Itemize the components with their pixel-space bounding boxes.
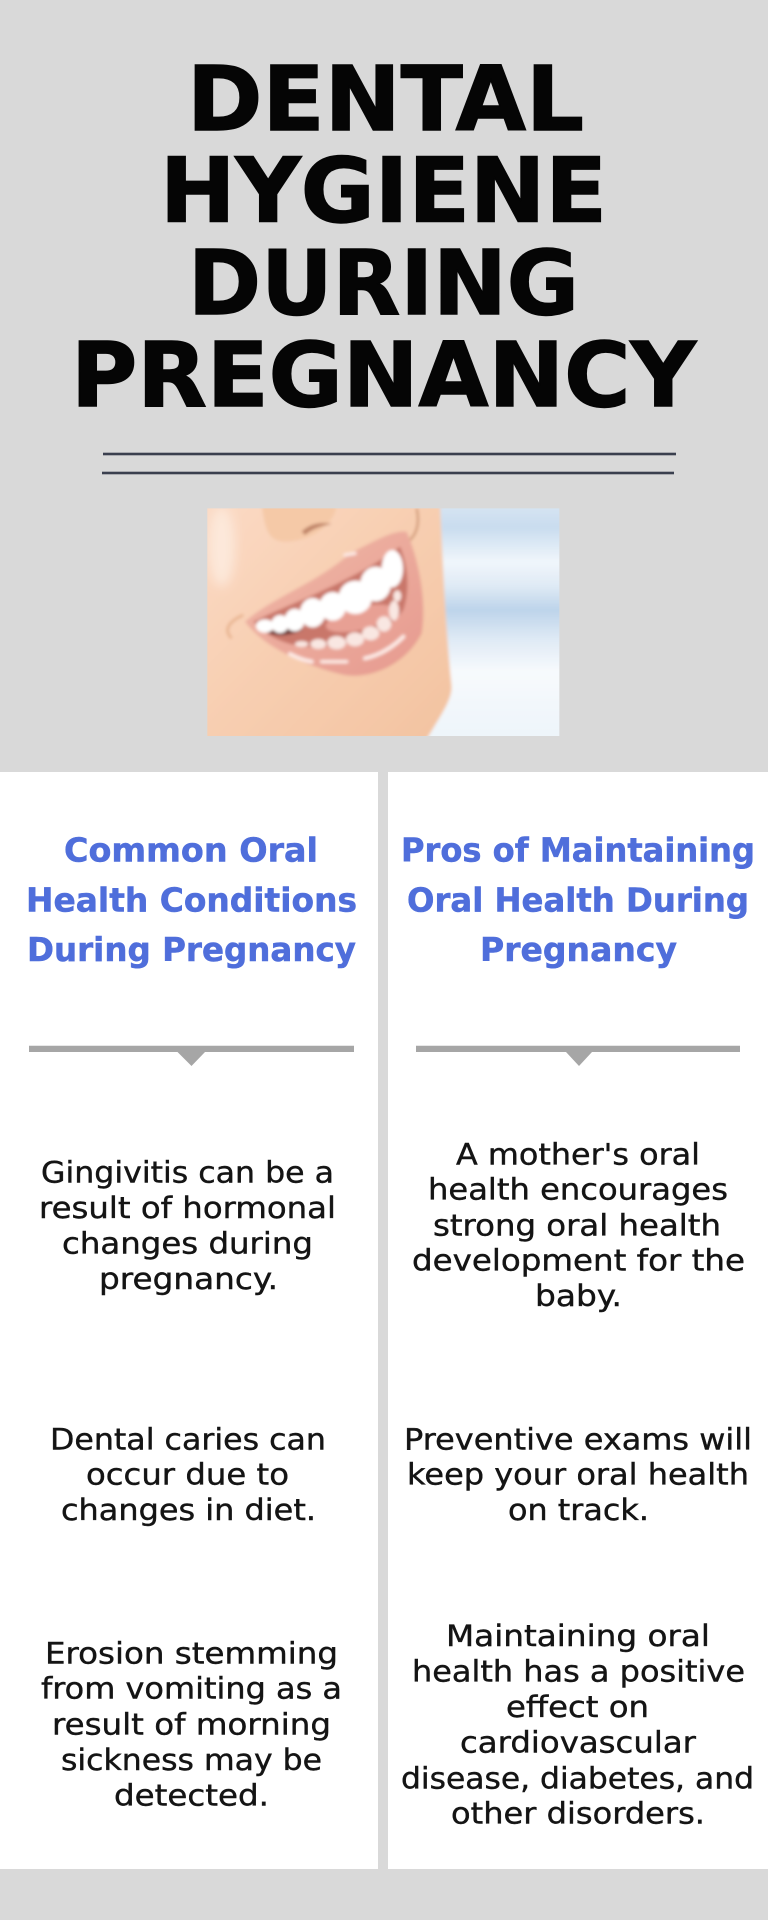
text block: preventive exams <box>404 1422 752 1527</box>
text block: gingivitis: Gingivitis can be a <box>41 1155 334 1189</box>
text block: gingivitis <box>39 1155 336 1296</box>
text block: dental caries: occur due to <box>86 1458 289 1492</box>
text block: dental caries: changes in diet. <box>61 1493 316 1527</box>
text block: preventive exams: keep your oral health <box>407 1458 749 1492</box>
text block: mother's oral health: health encourages <box>428 1173 728 1207</box>
lower teeth <box>295 590 401 649</box>
text block: mother's oral health: development for the <box>412 1243 745 1277</box>
text block: preventive exams: on track. <box>508 1493 649 1527</box>
text block: dental caries: Dental caries can <box>50 1422 326 1456</box>
heading: common oral health conditions: During Pregnancy <box>27 930 356 969</box>
heading: pros of maintaining oral health: Pregnancy <box>480 930 677 969</box>
photo background: blurred sky <box>426 508 560 736</box>
dark gap <box>265 628 303 635</box>
heading: common oral health conditions <box>26 831 357 969</box>
panel: right column <box>388 772 768 1869</box>
text block: mother's oral health <box>412 1137 745 1313</box>
text block: maintaining oral health: other disorders. <box>451 1796 705 1830</box>
title: DURING <box>188 231 579 335</box>
mouth interior <box>253 547 407 647</box>
title: DENTAL <box>187 47 584 151</box>
text block: maintaining oral health <box>401 1619 754 1830</box>
tongue <box>324 603 390 634</box>
title: PREGNANCY <box>71 323 698 427</box>
title <box>71 47 698 427</box>
heading: common oral health conditions: Health Conditions <box>26 881 357 920</box>
text block: dental caries <box>50 1422 326 1527</box>
text block: gingivitis: pregnancy. <box>99 1262 278 1296</box>
heading: pros of maintaining oral health <box>401 831 755 969</box>
title double rule <box>102 453 676 474</box>
text block: maintaining oral health: Maintaining oral <box>446 1619 710 1653</box>
text block: erosion: result of morning <box>52 1707 331 1741</box>
upper teeth <box>256 550 403 633</box>
text block: maintaining oral health: disease, diabetes, and <box>401 1761 754 1795</box>
heading: pros of maintaining oral health: Oral Health During <box>407 881 749 920</box>
lip highlights <box>290 553 403 662</box>
text block: erosion: from vomiting as a <box>41 1672 342 1706</box>
text block: maintaining oral health: health has a positive <box>412 1655 745 1689</box>
text block: mother's oral health: A mother's oral <box>456 1137 700 1171</box>
text block: mother's oral health: baby. <box>535 1279 622 1313</box>
text block: maintaining oral health: effect on <box>506 1690 649 1724</box>
cheek fold at mouth corner <box>410 508 418 540</box>
face skin <box>207 508 454 736</box>
heading: pros of maintaining oral health: Pros of Maintaining <box>401 831 755 870</box>
smile crease <box>228 615 243 638</box>
photo: smiling mouth <box>207 508 560 736</box>
panel: left column <box>0 772 378 1869</box>
text block: erosion <box>41 1636 342 1813</box>
heading: common oral health conditions: Common Oral <box>64 831 318 870</box>
cheek highlight <box>208 507 235 587</box>
divider with pointer: right <box>416 1046 740 1066</box>
text block: erosion: detected. <box>114 1779 269 1813</box>
text block: gingivitis: result of hormonal <box>39 1191 336 1225</box>
lips <box>245 531 423 676</box>
text block: preventive exams: Preventive exams will <box>404 1422 752 1456</box>
text block: erosion: sickness may be <box>61 1743 322 1777</box>
title: HYGIENE <box>160 139 607 243</box>
text block: erosion: Erosion stemming <box>45 1636 338 1670</box>
nose <box>262 508 336 542</box>
text block: gingivitis: changes during <box>62 1226 313 1260</box>
text block: mother's oral health: strong oral health <box>433 1208 721 1242</box>
divider with pointer: left <box>29 1046 354 1066</box>
text block: maintaining oral health: cardiovascular <box>460 1726 696 1760</box>
